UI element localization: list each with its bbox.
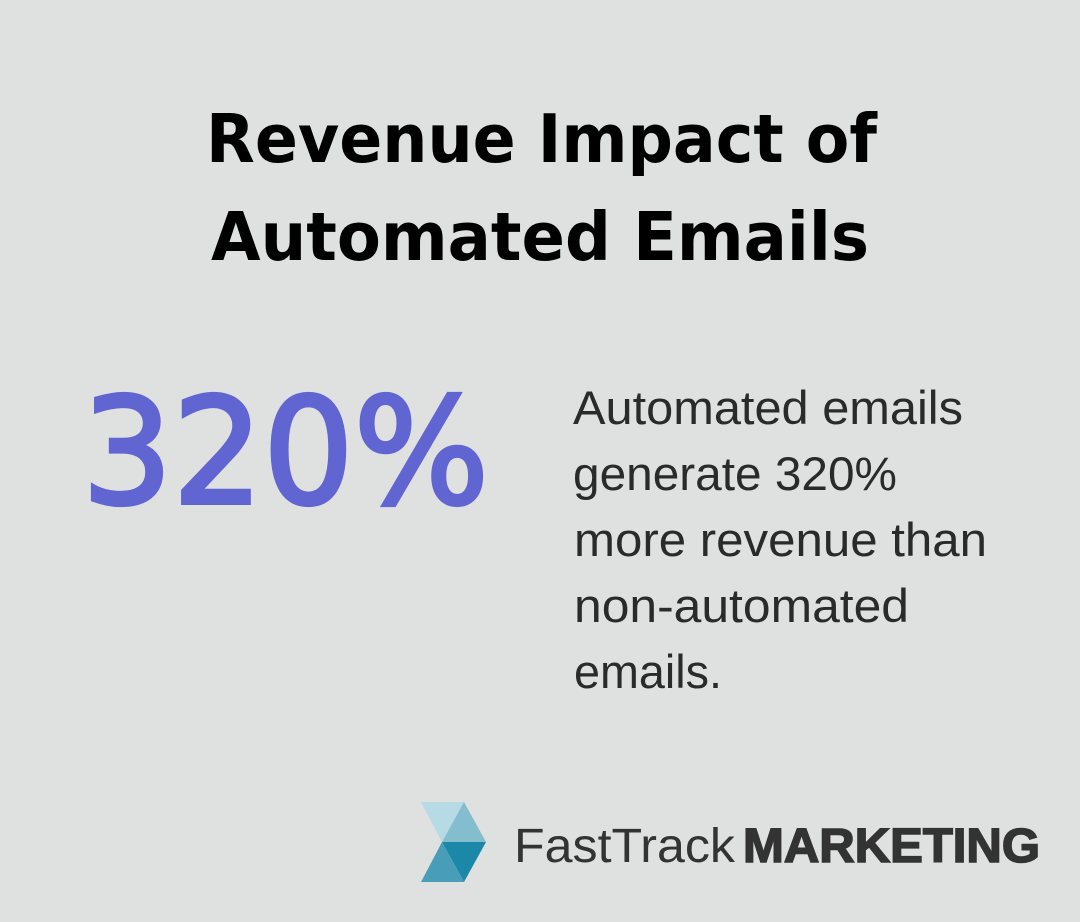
description text: more revenue than [574, 513, 987, 566]
description text: emails. [574, 645, 722, 698]
description text [573, 381, 987, 698]
logo: FastTrack Marketing [421, 802, 1040, 882]
description text: non-automated [574, 579, 909, 632]
logo wordmark: FastTrack [514, 820, 736, 873]
title: Revenue Impact of [206, 100, 878, 178]
title [206, 100, 878, 276]
logo wordmark [514, 820, 1040, 873]
description text: generate 320% [573, 447, 897, 500]
description text: Automated emails [573, 381, 963, 434]
icon: logo triangles [421, 802, 486, 882]
logo wordmark: MARKETING [743, 820, 1040, 873]
title: Automated Emails [211, 198, 869, 276]
big statistic: 320%: 320% [82, 367, 489, 538]
